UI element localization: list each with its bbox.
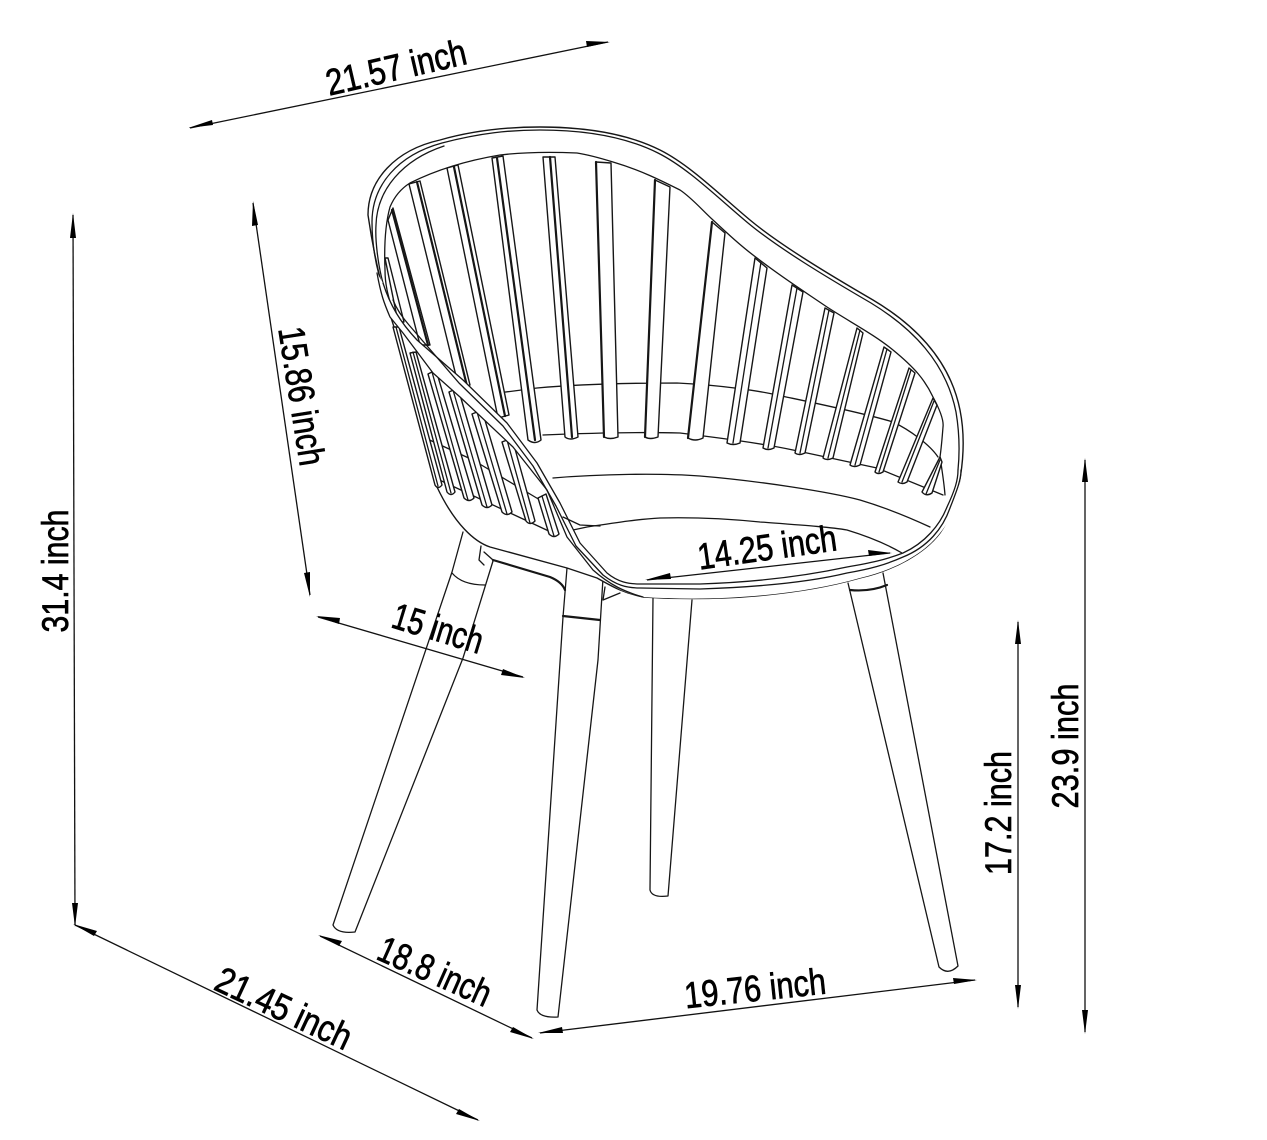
chair shell outline bbox=[368, 127, 963, 599]
chair legs bbox=[333, 532, 958, 1017]
back and seat contour lines bbox=[385, 152, 945, 560]
dimension: overall depth 21.45 inch bbox=[73, 924, 480, 1121]
dimension: overall depth 21.45 inch: 21.45 inch bbox=[209, 959, 359, 1058]
lower left slats bbox=[393, 327, 559, 536]
back slats bbox=[385, 156, 942, 536]
dimension: seat height 17.2 inch: 17.2 inch bbox=[978, 751, 1019, 875]
dimension: overall height 31.4 inch bbox=[35, 213, 78, 927]
dimension: top width 21.57 inch: 21.57 inch bbox=[322, 31, 470, 104]
right back slats bbox=[688, 222, 942, 495]
dimension: leg width 19.76 inch: 19.76 inch bbox=[682, 961, 828, 1016]
dimension: leg depth 18.8 inch bbox=[318, 928, 534, 1039]
dimension: seat depth 15 inch bbox=[316, 595, 525, 678]
dimension: overall height 31.4 inch: 31.4 inch bbox=[35, 509, 76, 633]
dimension: arm height 23.9 inch bbox=[1045, 458, 1088, 1034]
under-seat bracket bbox=[479, 546, 620, 600]
dimension: seat width 14.25 inch: 14.25 inch bbox=[695, 517, 839, 578]
chair line drawing bbox=[333, 127, 963, 1017]
dimension: back height 15.86 inch bbox=[252, 201, 333, 597]
dimension: leg depth 18.8 inch: 18.8 inch bbox=[372, 928, 498, 1015]
front armrest rail bbox=[377, 273, 961, 599]
dimension: arm height 23.9 inch: 23.9 inch bbox=[1045, 684, 1086, 808]
right leg bbox=[848, 573, 958, 971]
dimension: back height 15.86 inch: 15.86 inch bbox=[270, 324, 333, 468]
dimension: top width 21.57 inch bbox=[188, 31, 610, 128]
upper back slats bbox=[385, 156, 670, 442]
dimension: seat depth 15 inch: 15 inch bbox=[387, 595, 488, 662]
dimension: leg width 19.76 inch bbox=[538, 961, 977, 1033]
rear left leg bbox=[333, 532, 493, 932]
front leg bbox=[537, 568, 603, 1017]
dimension: seat height 17.2 inch bbox=[978, 620, 1021, 1009]
dimension: seat width 14.25 inch bbox=[645, 517, 892, 580]
rear centre leg bbox=[650, 598, 692, 896]
